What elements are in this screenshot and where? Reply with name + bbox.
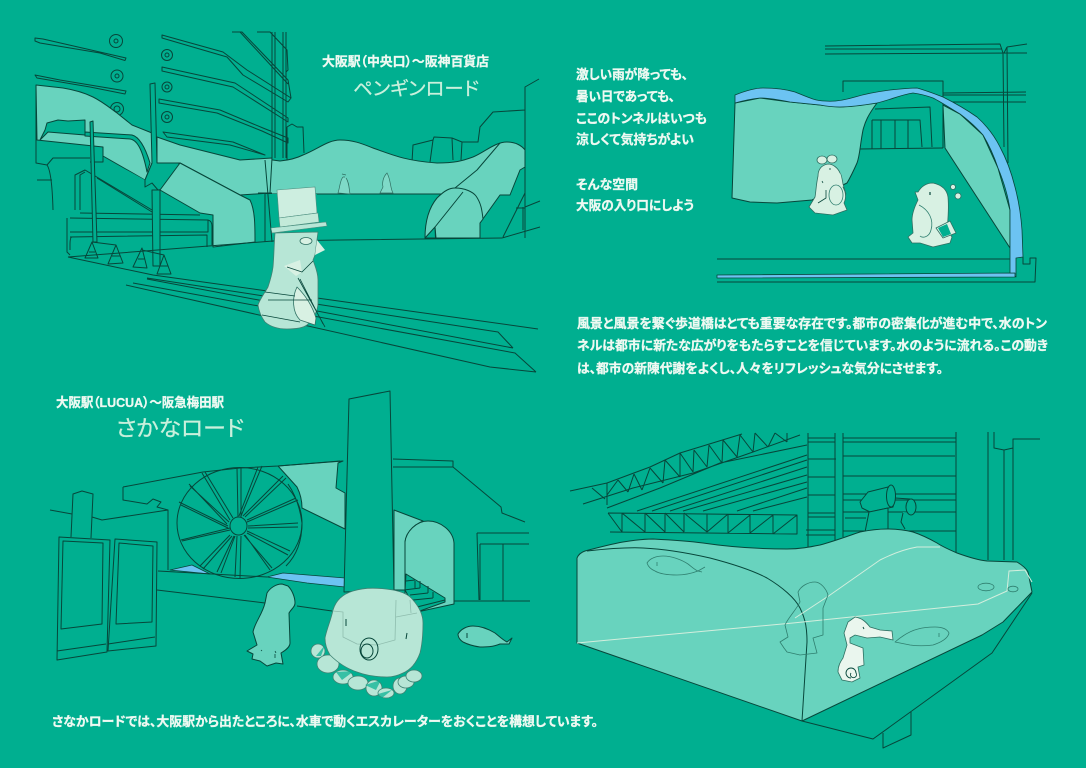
tall pillar <box>344 391 394 592</box>
text block: tunnel message: 激しい雨が降っても、 <box>576 67 688 82</box>
water band <box>735 88 1023 277</box>
arch <box>425 188 483 238</box>
text block: fish road caption: さなかロードでは、大阪駅から出たところに、水車で動くエスカレーターをおくことを構想しています。 <box>52 714 598 729</box>
floor lines and water channel <box>717 273 1015 278</box>
left wall <box>732 98 877 203</box>
text block: tunnel message: ここのトンネルはいつも <box>576 111 707 126</box>
building and stair arch <box>393 459 530 612</box>
small distant penguins <box>338 173 393 194</box>
panel: water wheel escalator scene <box>50 391 530 698</box>
roof outline <box>50 461 340 570</box>
penguin with ribbon <box>809 155 847 215</box>
text block: tunnel message <box>576 67 707 213</box>
text block: pedestrian bridge description <box>577 316 1048 376</box>
central post <box>145 83 179 190</box>
penguin with book <box>908 183 961 247</box>
fish outlines in tunnel <box>647 556 1018 646</box>
street posts <box>90 121 97 242</box>
roof truss <box>570 433 807 508</box>
panel: fish tunnel scene <box>570 432 1040 748</box>
squid <box>247 584 295 666</box>
ground lines <box>68 238 538 372</box>
water wheel <box>177 466 302 578</box>
periscope <box>860 485 916 532</box>
text block: tunnel message: 大阪の入り口にしよう <box>576 198 694 213</box>
text block: tunnel message: 涼しくて気持ちがよい <box>576 132 694 147</box>
upper facade bars and rings <box>35 32 291 158</box>
right wall <box>943 105 1010 248</box>
heading: fish road: さかなロード <box>116 416 244 441</box>
undercarriage <box>802 593 1032 748</box>
seahorse <box>838 617 893 682</box>
water channel <box>170 565 345 587</box>
left tunnel wall <box>36 85 152 180</box>
back wall and doors <box>859 107 943 149</box>
vertical lattice <box>806 432 1040 560</box>
heading: penguin road: ペンギンロード <box>353 78 479 100</box>
tunnel body <box>577 529 1032 721</box>
lower stair wall <box>160 163 255 247</box>
penguin with top hat <box>258 187 327 329</box>
fish <box>458 626 512 647</box>
text block: pedestrian bridge description: は、都市の新陳代謝をよくし、人々をリフレッシュな気分にさせます。 <box>577 361 943 376</box>
slanted roof lines <box>637 455 807 511</box>
barrier cones <box>85 242 171 274</box>
light wall behind wheel <box>278 461 345 529</box>
text block: pedestrian bridge description: ネルは都市に新たな広がりをもたらすことを信じています。水のように流れる。この動き <box>577 338 1048 353</box>
upper structure lines <box>825 44 1027 163</box>
tunnel wall band <box>265 140 525 223</box>
octopus <box>311 588 423 698</box>
lower truss <box>608 513 797 534</box>
panel: penguin road scene <box>35 32 540 372</box>
heading: penguin road location: 大阪駅（中央口）〜阪神百貨店 <box>322 54 489 69</box>
text block: tunnel message: 暑い日であっても、 <box>576 89 675 104</box>
background buildings <box>287 79 539 238</box>
doors <box>57 491 157 660</box>
panel: water tunnel with two penguins <box>717 44 1036 282</box>
heading: fish road location: 大阪駅（LUCUA）〜阪急梅田駅 <box>56 395 224 410</box>
squid outline in tunnel <box>780 582 828 655</box>
text block: pedestrian bridge description: 風景と風景を繋ぐ歩道橋はとても重要な存在です。都市の密集化が進む中で、水のトン <box>577 316 1048 331</box>
text block: tunnel message: そんな空間 <box>576 177 638 192</box>
